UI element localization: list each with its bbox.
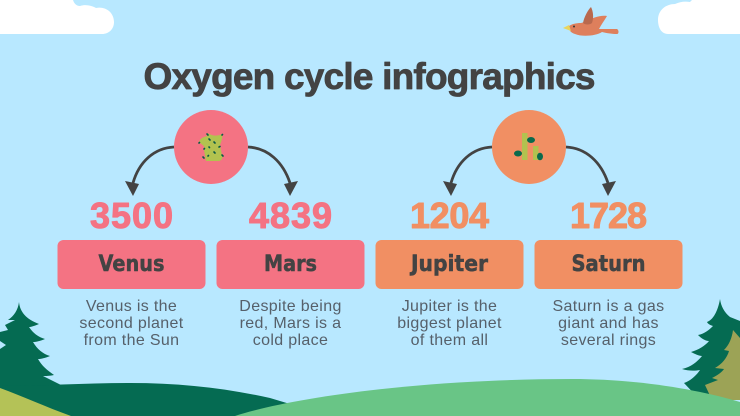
panel: Venus bbox=[58, 240, 206, 289]
tree: right front bbox=[705, 330, 740, 400]
arrow: pink circle to Mars bbox=[248, 147, 298, 196]
panel: Mars: Mars bbox=[264, 252, 317, 277]
cloud: top right bbox=[658, 0, 740, 34]
title: Oxygen cycle infographics bbox=[144, 56, 596, 97]
text: Saturn description: several rings bbox=[561, 332, 656, 349]
panel: Jupiter: Jupiter bbox=[409, 252, 488, 277]
text: Mars description: red, Mars is a bbox=[240, 315, 341, 332]
text: Saturn description: giant and has bbox=[558, 315, 659, 332]
number: 4839: 4839 bbox=[249, 195, 332, 236]
text: Mars description: Despite being bbox=[239, 298, 342, 315]
arrow: pink circle to Venus bbox=[125, 147, 174, 196]
panel: Jupiter bbox=[376, 240, 524, 289]
panel: Mars bbox=[216, 240, 364, 289]
tree: left bbox=[0, 302, 63, 386]
panel: Saturn bbox=[534, 240, 682, 289]
number: 1728: 1728 bbox=[570, 195, 647, 236]
arrow: orange circle to Jupiter bbox=[443, 147, 492, 196]
text: Saturn description: Saturn is a gas bbox=[553, 298, 664, 315]
text: Venus description: second planet bbox=[79, 315, 184, 332]
number: 3500: 3500 bbox=[90, 195, 173, 236]
text: Jupiter description: biggest planet bbox=[397, 315, 502, 332]
text: Mars description: cold place bbox=[253, 332, 328, 349]
hill: green bbox=[235, 379, 740, 416]
panel: Venus: Venus bbox=[98, 252, 164, 277]
icon: bird bbox=[563, 7, 618, 36]
cloud: top left bbox=[0, 0, 114, 34]
number: 1204: 1204 bbox=[410, 195, 489, 236]
text: Venus description: Venus is the bbox=[86, 298, 177, 315]
icon group: orange circle with plant bbox=[492, 110, 566, 184]
text: Venus description: from the Sun bbox=[84, 332, 179, 349]
hill: dark green bbox=[0, 383, 330, 416]
text: Jupiter description: of them all bbox=[411, 332, 488, 349]
tree: right back bbox=[682, 299, 740, 400]
hill: olive left bbox=[0, 388, 71, 416]
icon group: pink circle with plant bbox=[174, 110, 248, 184]
panel: Saturn: Saturn bbox=[572, 252, 646, 277]
text: Jupiter description: Jupiter is the bbox=[402, 298, 497, 315]
arrow: orange circle to Saturn bbox=[566, 147, 616, 196]
